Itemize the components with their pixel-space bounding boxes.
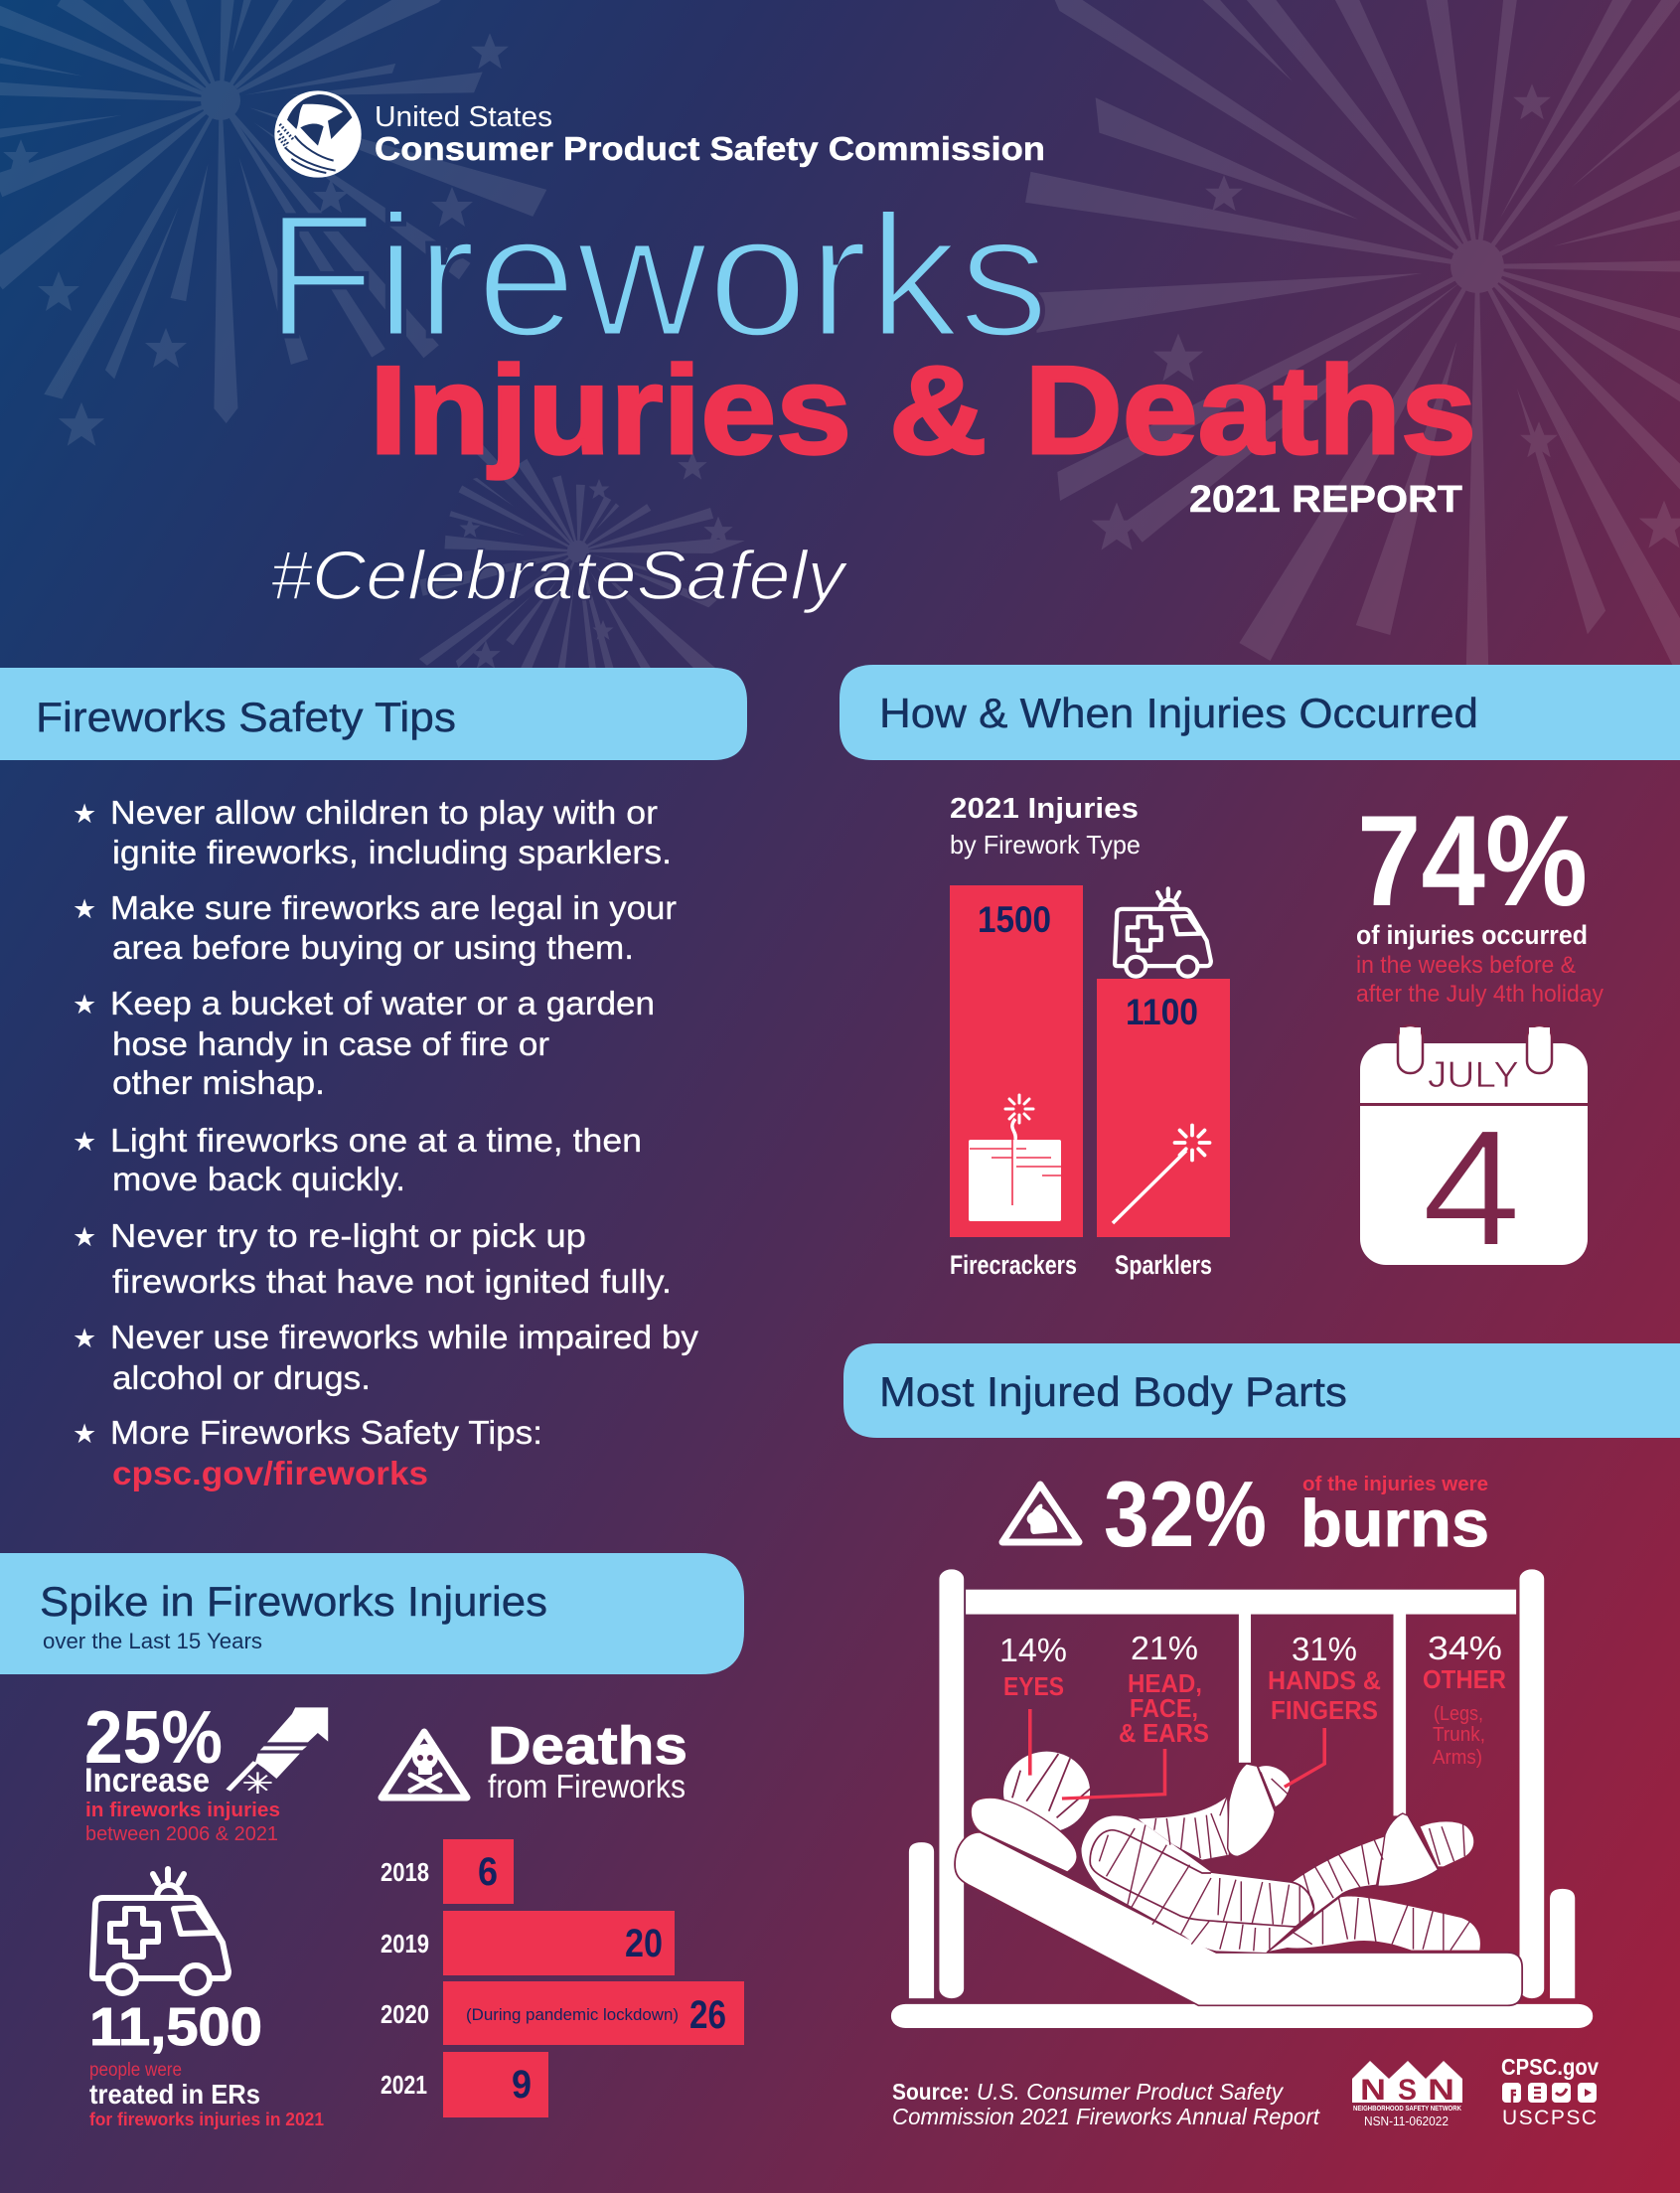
bar chart: injuries by firework type: Sparklers bbox=[1115, 1250, 1212, 1280]
stat: 25 percent increase: 25% bbox=[84, 1695, 223, 1779]
stat: 74 percent: of injuries occurred bbox=[1356, 920, 1588, 950]
tips list: ★ bbox=[73, 1324, 96, 1354]
bar chart: deaths by year: 2019 bbox=[381, 1929, 429, 1958]
tips list: Make sure fireworks are legal in your bbox=[110, 889, 677, 926]
icon: July 4 calendar: JULY bbox=[1428, 1054, 1519, 1095]
heading banner bbox=[0, 668, 747, 760]
tips list: area before buying or using them. bbox=[112, 929, 634, 966]
panel: spike in fireworks injuries bbox=[0, 1553, 744, 2129]
tips list: ★ bbox=[73, 1419, 96, 1450]
stat: 25 percent increase: between 2006 & 2021 bbox=[85, 1823, 278, 1845]
stat: 74 percent bbox=[1356, 788, 1604, 1008]
label: hands and fingers: 31% bbox=[1292, 1631, 1357, 1667]
bar chart: deaths by year: (During pandemic lockdown) bbox=[466, 2006, 679, 2024]
bar chart: deaths by year: 2020 bbox=[381, 1999, 429, 2029]
stat: 32 percent burns: burns bbox=[1300, 1487, 1489, 1561]
stat: 25 percent increase: in fireworks injuries bbox=[85, 1800, 280, 1821]
heading banner bbox=[0, 1553, 744, 1674]
bar chart: deaths by year: 26 bbox=[689, 1993, 726, 2037]
tips list: ★ bbox=[73, 990, 96, 1020]
deaths heading bbox=[488, 1716, 687, 1804]
bar chart: deaths by year bbox=[381, 1839, 744, 2117]
icon: CPSC seal bbox=[274, 90, 362, 178]
source note bbox=[892, 2079, 1321, 2129]
stat: 32 percent burns bbox=[1104, 1462, 1489, 1566]
bar chart: deaths by year: 20 bbox=[625, 1922, 663, 1965]
stat: 32 percent burns: 32% bbox=[1104, 1462, 1267, 1566]
stat: 11,500 treated: treated in ERs bbox=[89, 2079, 260, 2110]
label: eyes: 14% bbox=[999, 1632, 1067, 1668]
tips list: More Fireworks Safety Tips: bbox=[110, 1414, 542, 1451]
tips list: hose handy in case of fire or bbox=[112, 1025, 549, 1062]
source note: U.S. Consumer Product Safety bbox=[977, 2079, 1284, 2105]
illustration: bandaged patient bbox=[955, 1709, 1522, 2005]
tips list: alcohol or drugs. bbox=[112, 1359, 371, 1396]
bar chart: injuries by firework type: 2021 Injuries bbox=[950, 793, 1139, 825]
heading banner: over the Last 15 Years bbox=[43, 1629, 262, 1653]
bar chart: deaths by year: 9 bbox=[512, 2063, 532, 2107]
stat: 74 percent: after the July 4th holiday bbox=[1356, 981, 1604, 1008]
tips list: Never try to re-light or pick up bbox=[110, 1217, 586, 1254]
title bbox=[265, 179, 1476, 521]
bar chart: injuries by firework type: by Firework Type bbox=[950, 830, 1141, 860]
tips list: move back quickly. bbox=[112, 1161, 405, 1197]
panel: how and when injuries occurred bbox=[840, 665, 1680, 1281]
title: Fireworks bbox=[265, 179, 1049, 374]
tips list: cpsc.gov/fireworks bbox=[112, 1455, 428, 1491]
tips list: ignite fireworks, including sparklers. bbox=[112, 834, 672, 870]
heading banner: Most Injured Body Parts bbox=[879, 1368, 1347, 1415]
panel: most injured body parts bbox=[843, 1343, 1680, 2028]
deaths heading: Deaths bbox=[488, 1716, 687, 1776]
label: hands and fingers: HANDS & bbox=[1268, 1665, 1381, 1695]
heading banner: How & When Injuries Occurred bbox=[879, 690, 1478, 736]
stat: 11,500 treated: for fireworks injuries in 2021 bbox=[89, 2110, 324, 2129]
social handles bbox=[1501, 2054, 1599, 2129]
heading banner: Fireworks Safety Tips bbox=[36, 694, 456, 740]
tips list: ★ bbox=[73, 1222, 96, 1253]
label: eyes: EYES bbox=[1003, 1671, 1064, 1701]
heading banner bbox=[840, 665, 1680, 760]
illustration: bed frame bbox=[891, 1569, 1593, 2028]
stat: 25 percent increase bbox=[84, 1695, 280, 1845]
label: hands and fingers: FINGERS bbox=[1271, 1695, 1378, 1725]
label: other bbox=[1423, 1630, 1506, 1769]
bar chart: injuries by firework type: 1100 bbox=[1126, 992, 1198, 1032]
tips list: Keep a bucket of water or a garden bbox=[110, 985, 655, 1021]
tips list: Never allow children to play with or bbox=[110, 794, 658, 831]
icon: ambulance bbox=[1115, 888, 1211, 977]
bar chart: injuries by firework type: 1500 bbox=[978, 899, 1051, 940]
label: eyes bbox=[999, 1632, 1067, 1701]
tips list: other mishap. bbox=[112, 1064, 325, 1101]
deaths heading: from Fireworks bbox=[488, 1768, 686, 1804]
logo: neighborhood safety network: NSN-11-062022 bbox=[1364, 2114, 1449, 2128]
header: CPSC logo and name bbox=[274, 90, 1045, 178]
icon: social media squares bbox=[1502, 2083, 1597, 2103]
icon: sparkler bbox=[1113, 1125, 1210, 1223]
label: head, face and ears: 21% bbox=[1131, 1630, 1198, 1666]
bar chart: injuries by firework type bbox=[950, 793, 1230, 1280]
stat: 32 percent burns: of the injuries were bbox=[1302, 1474, 1488, 1495]
icon: firecrackers bbox=[969, 1095, 1061, 1221]
stat: 11,500 treated bbox=[89, 1997, 324, 2129]
icon: July 4 calendar: 4 bbox=[1422, 1096, 1521, 1281]
agency name: United States bbox=[375, 101, 552, 133]
stat: 11,500 treated: 11,500 bbox=[89, 1997, 262, 2057]
tips list: fireworks that have not ignited fully. bbox=[112, 1263, 672, 1300]
label: head, face and ears: FACE, bbox=[1130, 1693, 1198, 1723]
tips list bbox=[73, 794, 699, 1491]
icon: rocket arrow bbox=[229, 1707, 328, 1794]
label: head, face and ears bbox=[1119, 1630, 1209, 1748]
logo: neighborhood safety network: N bbox=[1360, 2074, 1386, 2107]
decorative fireworks bbox=[0, 0, 1680, 793]
bar chart: injuries by firework type: Firecrackers bbox=[950, 1250, 1077, 1280]
agency name bbox=[375, 101, 1045, 167]
label: other: OTHER bbox=[1423, 1664, 1506, 1694]
label: other: (Legs, bbox=[1434, 1703, 1483, 1725]
stat: 25 percent increase: Increase bbox=[84, 1762, 210, 1800]
panel: fireworks safety tips bbox=[0, 668, 747, 1491]
tips list: ★ bbox=[73, 1127, 96, 1158]
label: other: 34% bbox=[1428, 1630, 1502, 1666]
label: head, face and ears: HEAD, bbox=[1128, 1668, 1202, 1698]
source note: Commission 2021 Fireworks Annual Report bbox=[892, 2104, 1321, 2129]
tips list: ★ bbox=[73, 894, 96, 925]
logo: neighborhood safety network: N bbox=[1428, 2074, 1454, 2107]
label: other: Trunk, bbox=[1433, 1724, 1485, 1746]
social handles: CPSC.gov bbox=[1501, 2054, 1599, 2080]
tips list: Light fireworks one at a time, then bbox=[110, 1122, 642, 1159]
heading banner: Spike in Fireworks Injuries bbox=[40, 1578, 547, 1625]
stat: 11,500 treated: people were bbox=[89, 2060, 182, 2081]
agency name: Consumer Product Safety Commission bbox=[375, 130, 1045, 167]
tips list: Never use fireworks while impaired by bbox=[110, 1319, 699, 1355]
logo: neighborhood safety network: S bbox=[1398, 2074, 1417, 2107]
title: Injuries & Deaths bbox=[370, 340, 1476, 480]
social handles: USCPSC bbox=[1502, 2107, 1597, 2129]
label: head, face and ears: & EARS bbox=[1119, 1718, 1209, 1748]
icon: burn warning triangle bbox=[1002, 1485, 1079, 1542]
icon: July 4 calendar bbox=[1360, 1025, 1588, 1281]
bar chart: deaths by year: 6 bbox=[478, 1850, 498, 1894]
hashtag: #CelebrateSafely bbox=[270, 537, 848, 614]
label: hands and fingers bbox=[1268, 1631, 1381, 1725]
bar chart: deaths by year: 2018 bbox=[381, 1857, 429, 1887]
title: 2021 REPORT bbox=[1189, 479, 1462, 521]
label: other: Arms) bbox=[1433, 1747, 1482, 1769]
stat: 74 percent: 74% bbox=[1357, 788, 1588, 933]
logo: neighborhood safety network: NEIGHBORHOOD SAFETY NETWORK bbox=[1353, 2104, 1461, 2113]
stat: 74 percent: in the weeks before & bbox=[1356, 952, 1576, 979]
tips list: ★ bbox=[73, 799, 96, 830]
heading banner bbox=[843, 1343, 1680, 1438]
logo: neighborhood safety network bbox=[1352, 2061, 1462, 2128]
source note: Source: bbox=[892, 2079, 970, 2105]
icon: skull warning triangle bbox=[382, 1732, 467, 1798]
bar chart: deaths by year: 2021 bbox=[381, 2070, 427, 2100]
icon: ambulance bbox=[92, 1869, 229, 1993]
